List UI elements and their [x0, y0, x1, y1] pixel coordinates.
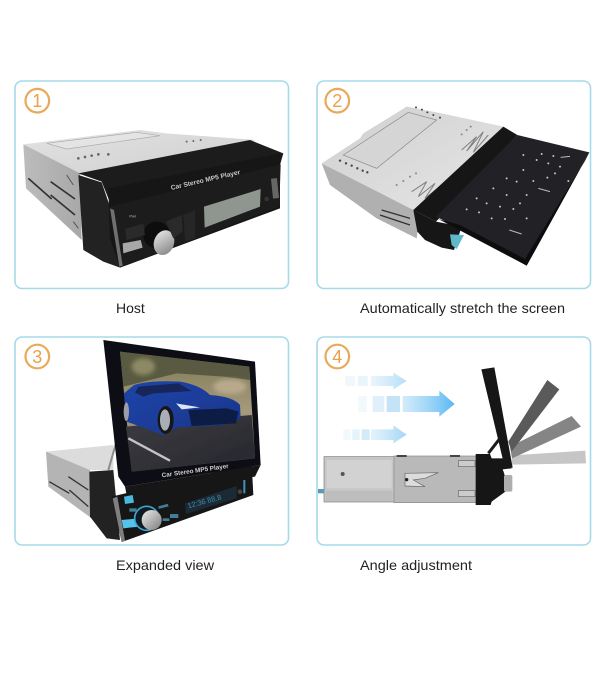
product photo: host unit: Pwr: [129, 214, 137, 219]
panel 2: stretched screen: [317, 81, 590, 288]
number badge 4: [326, 345, 349, 368]
product photo: unit with screen up: [46, 340, 261, 542]
panel 1: host: [15, 81, 288, 288]
panel frame 2: [317, 81, 590, 288]
number badge 1: 1: [32, 91, 42, 111]
panel frame 3: [15, 337, 288, 545]
number badge 4: 4: [332, 347, 342, 367]
number badge 1: [26, 89, 49, 112]
panel 3: expanded view: [15, 337, 288, 545]
number badge 3: 3: [32, 347, 42, 367]
product photo: extended screen: [322, 106, 589, 266]
caption: angle adjustment: Angle adjustment: [360, 557, 472, 573]
product photo: host unit: Car Stereo MP5 Player: [170, 169, 241, 192]
product photo: host unit: [23, 130, 283, 268]
motion arrows: [343, 373, 455, 443]
panel frame 4: [317, 337, 590, 545]
panel frame 1: [15, 81, 288, 288]
product photo: unit with screen up: 12:36 88.8: [187, 493, 222, 510]
number badge 3: [26, 345, 49, 368]
caption: expanded view: Expanded view: [116, 557, 215, 573]
caption: automatically stretch the screen: Automatically stretch the screen: [360, 300, 565, 316]
side view of unit with tilting screens: [318, 367, 586, 505]
number badge 2: 2: [332, 91, 342, 111]
product photo: unit with screen up: Car Stereo MP5 Player: [161, 463, 230, 479]
number badge 2: [326, 89, 349, 112]
panel 4: angle adjustment: [317, 337, 590, 545]
caption: host: Host: [116, 300, 145, 316]
